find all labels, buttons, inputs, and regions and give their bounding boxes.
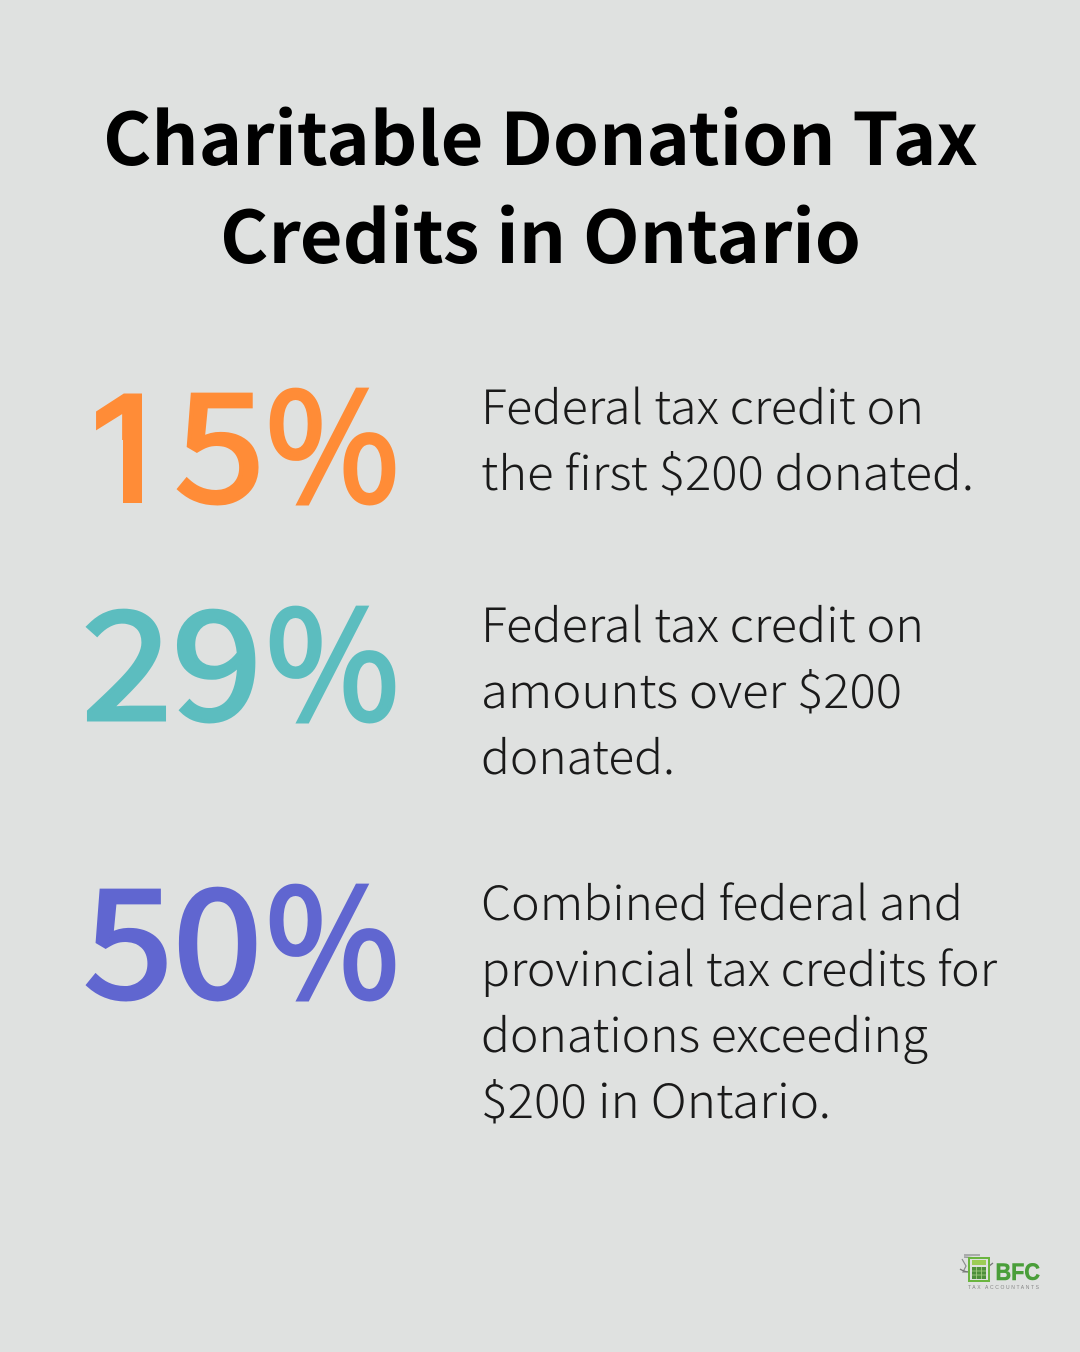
description: 50%: $200 in Ontario. <box>481 1063 831 1132</box>
description: 15% <box>481 369 974 504</box>
description: 50% <box>481 865 997 1132</box>
number: 50% <box>84 824 399 1042</box>
title: Charitable Donation Tax <box>103 81 978 186</box>
number: 50%: 50 <box>84 824 262 1042</box>
description: 29% <box>481 587 924 788</box>
icon: calculator <box>960 1255 993 1281</box>
description: 29%: amounts over $200 <box>481 653 902 722</box>
description: 50%: Combined federal and <box>481 865 963 934</box>
stat: 50% <box>84 824 997 1132</box>
description: 29%: Federal tax credit on <box>481 587 924 656</box>
stat: 29% <box>82 546 924 788</box>
description: 15%: Federal tax credit on <box>481 369 924 438</box>
title: Credits in Ontario <box>220 179 861 284</box>
number: 15%: 1 <box>86 361 174 537</box>
number: 29%: % <box>266 546 399 764</box>
number: 15%: 5 <box>175 328 265 546</box>
description: 50%: donations exceeding <box>481 997 928 1066</box>
title <box>103 81 978 284</box>
stat: 15% <box>96 386 970 506</box>
number: 29%: 29 <box>82 546 262 764</box>
logo wordmark: BFC <box>996 1259 1040 1286</box>
description: 29%: donated. <box>481 719 675 788</box>
number: 15% <box>96 388 396 506</box>
logo: BFC Tax Accountants <box>960 1255 1040 1291</box>
description: 15%: the first $200 donated. <box>481 435 974 504</box>
number: 50%: % <box>266 824 399 1042</box>
description: 50%: provincial tax credits for <box>481 931 997 1000</box>
number: 29% <box>82 546 399 764</box>
logo tagline: TAX ACCOUNTANTS <box>968 1285 1040 1291</box>
number: 15%: % <box>266 328 399 546</box>
